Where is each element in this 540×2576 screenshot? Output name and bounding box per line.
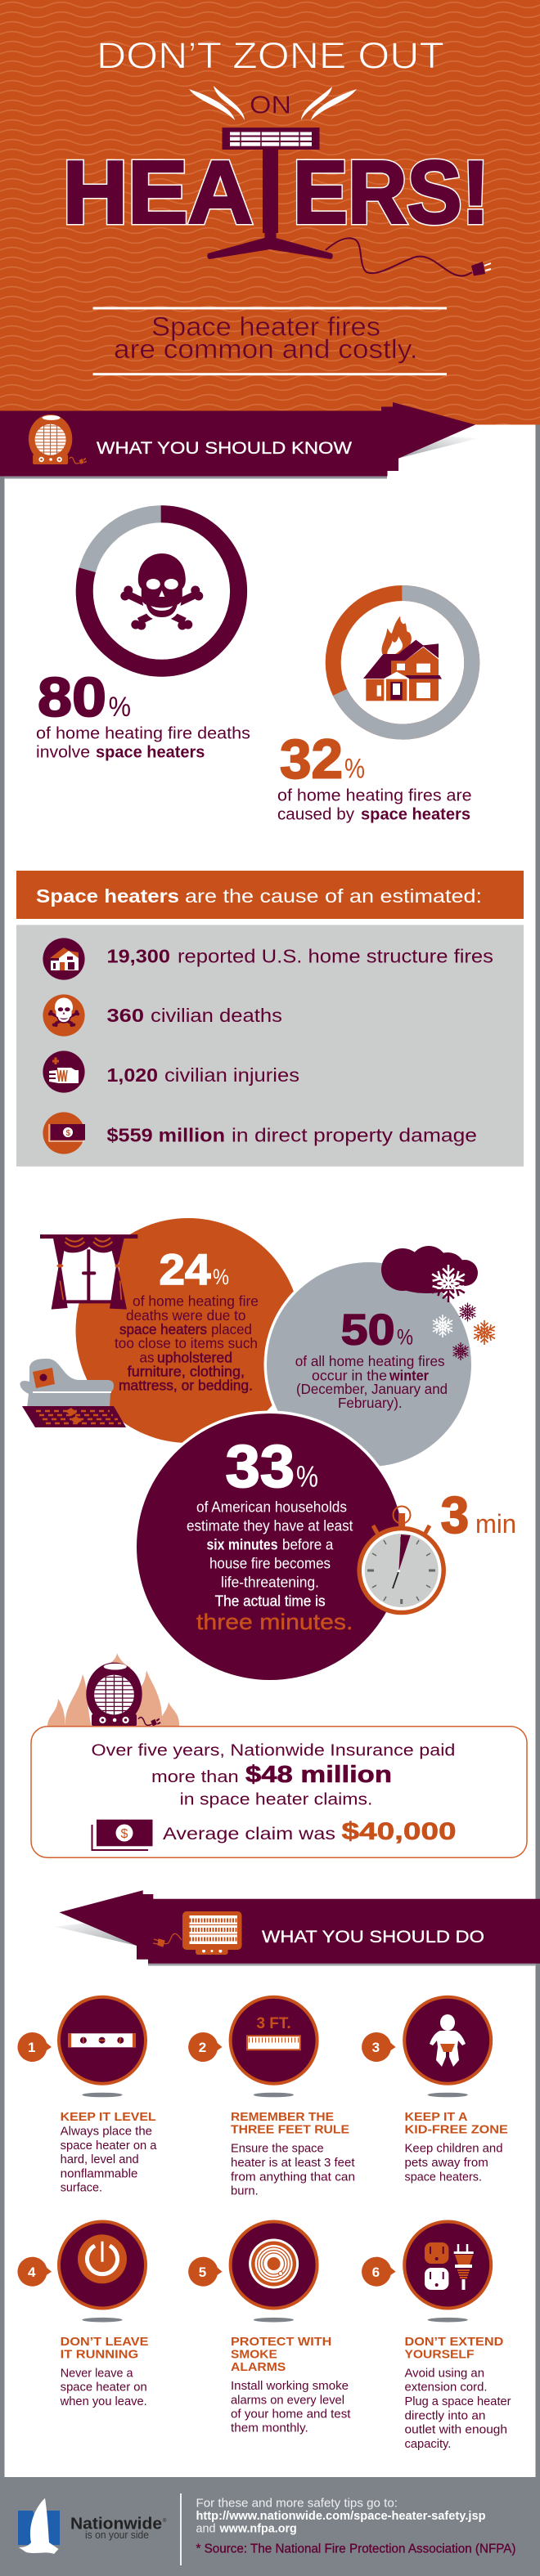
step text <box>231 2380 350 2435</box>
icon: house <box>43 938 85 980</box>
panel: estimated causes heading <box>16 871 524 919</box>
caption: space heaters <box>96 744 205 762</box>
claims text: Over five years, Nationwide Insurance paid <box>92 1740 455 1759</box>
caption: furniture, clothing, <box>128 1363 245 1379</box>
caption: estimate they have at least <box>187 1517 353 1534</box>
stat: deaths: 360 <box>106 1005 144 1026</box>
stat: property damage <box>106 1124 477 1145</box>
word heaters: HEA <box>63 142 253 242</box>
step text <box>61 2126 157 2195</box>
white content area <box>5 424 535 2477</box>
step heading <box>61 2335 148 2361</box>
icon: power button <box>59 2222 146 2309</box>
floor shadow <box>254 2093 294 2097</box>
stat: injuries: 1,020 <box>106 1064 158 1086</box>
safety tips text: www.nfpa.org <box>219 2521 297 2535</box>
average claim: Average claim was <box>163 1824 335 1844</box>
donut chart 80 percent <box>84 514 239 668</box>
divider <box>180 2493 182 2565</box>
step text: from anything that can <box>231 2171 355 2184</box>
icon: ruler: 3 FT. <box>257 2015 291 2032</box>
safety tips text: For these and more safety tips go to: <box>196 2497 398 2511</box>
donut chart 32 percent <box>333 593 472 732</box>
stat: 32 percent <box>277 593 472 824</box>
steam wisps <box>189 86 357 120</box>
stat: property damage: $559 million <box>106 1124 225 1145</box>
caption: of home heating fire deaths <box>36 724 250 742</box>
step text: directly into an <box>404 2409 485 2422</box>
number 50: 50 <box>341 1306 395 1355</box>
power cord and plug <box>326 238 491 276</box>
caption: of home heating fire <box>133 1293 259 1310</box>
panel: estimated causes heading: are the cause of an estimated: <box>185 885 482 907</box>
icon: fan heater <box>29 414 87 464</box>
number 24: 24 <box>159 1246 211 1294</box>
step badge 6: 6 <box>372 2265 380 2280</box>
step badge 2: 2 <box>199 2040 206 2055</box>
bubble: 24 percent <box>20 1218 301 1443</box>
step badge 2 <box>188 2032 223 2062</box>
step text: of your home and test <box>231 2408 350 2421</box>
step heading: THREE FEET RULE <box>231 2122 349 2136</box>
floor shadow <box>428 2318 468 2322</box>
stat: home fires: reported U.S. home structure fires <box>178 945 493 966</box>
banner heading: WHAT YOU SHOULD DO <box>262 1927 484 1947</box>
step badge 5: 5 <box>199 2265 206 2280</box>
title line: DON’T ZONE OUT <box>97 34 444 77</box>
rule top <box>93 307 447 309</box>
word heaters: ERS! <box>293 142 489 242</box>
icon: skull <box>43 994 85 1037</box>
panel: estimated counts <box>16 925 524 1167</box>
panel: nationwide claims <box>31 1727 527 1857</box>
safety tips text: and <box>196 2521 216 2535</box>
label: 3 min <box>441 1487 516 1544</box>
stat: injuries <box>106 1064 299 1086</box>
step badge 6 <box>362 2257 396 2287</box>
logo: nationwide: ® <box>163 2518 167 2524</box>
percent sign: % <box>213 1265 229 1289</box>
step badge 1: 1 <box>28 2040 35 2055</box>
caption: mattress, or bedding. <box>119 1378 253 1394</box>
icon: outlets and plug <box>404 2222 491 2309</box>
caption: space heaters <box>119 1321 207 1337</box>
label: 3 min: min <box>475 1509 516 1539</box>
step text <box>231 2143 355 2198</box>
step text: Avoid using an <box>404 2367 484 2380</box>
step text <box>404 2143 502 2184</box>
icon: skull and crossbones <box>120 553 203 629</box>
step heading: PROTECT WITH <box>231 2335 331 2349</box>
footer panel <box>0 2477 540 2576</box>
claims text: $48 million <box>245 1762 392 1788</box>
step text: when you leave. <box>60 2395 147 2408</box>
caption: involve <box>36 744 90 762</box>
claims text: more than <box>151 1767 239 1786</box>
subtitle: Space heater fires <box>151 312 380 342</box>
icon: rug <box>22 1406 126 1427</box>
rule bottom <box>93 373 447 375</box>
banner heading: WHAT YOU SHOULD KNOW <box>97 438 353 458</box>
word on: ON <box>250 90 291 119</box>
step text: Always place the <box>61 2126 152 2139</box>
stat: deaths <box>106 1005 282 1026</box>
caption: of home heating fires are <box>277 786 472 804</box>
step 3: kid-free zone <box>362 1997 508 2184</box>
word heaters: ERS! <box>293 142 489 242</box>
step text: surface. <box>61 2182 102 2195</box>
caption: house fire becomes <box>209 1556 331 1572</box>
caption: occur in the <box>312 1367 387 1383</box>
subtitle: are common and costly. <box>114 334 417 364</box>
step text: extension cord. <box>404 2381 488 2395</box>
banner: what you should do <box>55 1890 540 1965</box>
stat: property damage: in direct property damage <box>232 1124 477 1145</box>
step text: capacity. <box>404 2438 451 2451</box>
step 5: smoke alarms <box>188 2222 350 2435</box>
step badge 3: 3 <box>372 2040 380 2055</box>
icon: smoke alarm <box>231 2222 317 2309</box>
icon: snow cloud <box>381 1246 497 1360</box>
step 4: do not leave it running <box>17 2222 148 2408</box>
step text: nonflammable <box>61 2167 137 2180</box>
caption: upholstered <box>157 1350 232 1366</box>
bubble: 33 percent <box>134 1411 406 1682</box>
step text: alarms on every level <box>231 2394 344 2407</box>
claims text <box>92 1740 455 1809</box>
number 33: 33 <box>226 1433 295 1499</box>
caption: as <box>139 1350 155 1366</box>
stat: injuries: civilian injuries <box>164 1064 299 1086</box>
label: 3 min: 3 <box>441 1487 469 1544</box>
step badge 4 <box>17 2257 52 2287</box>
icon: radiant heater <box>153 1911 242 1955</box>
icon: heater in flames <box>47 1653 179 1727</box>
caption <box>115 1293 259 1394</box>
caption <box>187 1499 353 1610</box>
caption: caused by <box>277 806 354 824</box>
floor shadow <box>254 2318 294 2322</box>
step heading <box>231 2335 331 2374</box>
stat: deaths: civilian deaths <box>151 1005 282 1026</box>
caption: deaths were due to <box>126 1307 245 1324</box>
step text: space heater on a <box>61 2139 157 2153</box>
number 80: 80 <box>38 666 106 728</box>
step heading: DON’T EXTEND <box>404 2335 503 2349</box>
source note: * Source: The National Fire Protection Association (NFPA) <box>196 2542 515 2556</box>
step text: hard, level and <box>61 2153 139 2166</box>
step 2: three feet rule <box>188 1997 355 2198</box>
panel: estimated causes heading: Space heaters <box>36 885 179 907</box>
caption: (December, January and <box>296 1381 448 1397</box>
icon: stopwatch <box>359 1506 443 1612</box>
heater letter T <box>207 128 333 259</box>
step heading: REMEMBER THE <box>231 2110 334 2124</box>
step heading <box>231 2110 349 2136</box>
step text: Ensure the space <box>231 2143 324 2156</box>
step text: outlet with enough <box>404 2424 507 2437</box>
icon: baby <box>404 1997 491 2084</box>
step badge 4: 4 <box>28 2265 36 2280</box>
caption: February). <box>338 1395 403 1411</box>
caption: of all home heating fires <box>295 1353 445 1369</box>
step text: Plug a space heater <box>404 2395 511 2408</box>
caption: space heaters <box>361 806 470 824</box>
icon: sofa <box>20 1359 114 1408</box>
step text: heater is at least 3 feet <box>231 2157 355 2170</box>
caption: winter <box>389 1367 429 1383</box>
stat: 80 percent <box>36 514 250 762</box>
icon: spirit level <box>59 1997 146 2084</box>
word heaters <box>63 142 489 242</box>
caption: The actual time is <box>215 1593 326 1610</box>
step heading: ALARMS <box>231 2360 286 2374</box>
percent sign: % <box>397 1325 413 1350</box>
step text: Never leave a <box>61 2367 133 2380</box>
average claim <box>163 1818 457 1845</box>
step heading: KEEP IT LEVEL <box>61 2110 156 2124</box>
step heading: KID-FREE ZONE <box>404 2122 508 2136</box>
step text <box>60 2367 147 2408</box>
caption <box>295 1353 448 1411</box>
step 6: do not extend yourself <box>362 2222 511 2451</box>
bubble: 50 percent <box>263 1246 497 1470</box>
subtitle <box>114 312 417 364</box>
icon: money <box>92 1820 152 1850</box>
caption: too close to items such <box>115 1335 258 1351</box>
logo: nationwide <box>18 2498 167 2554</box>
step badge 3 <box>362 2032 396 2062</box>
caption: before a <box>282 1536 334 1552</box>
step text: pets away from <box>404 2157 488 2170</box>
step heading: IT RUNNING <box>61 2347 138 2361</box>
caption <box>36 724 250 762</box>
caption <box>277 786 472 824</box>
step heading <box>404 2110 508 2136</box>
step badge 5 <box>188 2257 223 2287</box>
icon: ruler <box>231 1997 317 2084</box>
icon: money <box>43 1112 85 1154</box>
icon: window with curtains <box>40 1234 137 1310</box>
step text: them monthly. <box>231 2422 308 2435</box>
step text: Keep children and <box>404 2143 502 2156</box>
floor shadow <box>82 2093 123 2097</box>
logo: nationwide: is on your side <box>85 2529 149 2541</box>
step text: space heaters. <box>404 2171 482 2184</box>
caption: of American households <box>196 1499 347 1515</box>
header panel <box>0 0 540 425</box>
step text: burn. <box>231 2185 259 2198</box>
stat: home fires: 19,300 <box>106 945 170 966</box>
step heading: SMOKE <box>231 2347 277 2361</box>
floor shadow <box>428 2093 468 2097</box>
safety tips text <box>196 2497 486 2535</box>
step text <box>404 2367 511 2451</box>
percent sign: % <box>109 692 131 723</box>
step badge 1 <box>17 2032 52 2062</box>
word heaters: HEA <box>63 142 253 242</box>
floor shadow <box>82 2318 123 2322</box>
icon: house on fire <box>363 616 442 701</box>
icon: money: $ <box>121 1827 128 1841</box>
claims text: in space heater claims. <box>180 1790 372 1809</box>
icon: money: $ <box>65 1129 70 1138</box>
caption: placed <box>211 1321 252 1337</box>
step text: Install working smoke <box>231 2380 349 2393</box>
step heading: DON’T LEAVE <box>61 2335 148 2349</box>
caption: life-threatening. <box>221 1575 319 1591</box>
logo: nationwide: Nationwide <box>70 2515 162 2533</box>
banner: what you should know <box>0 402 479 479</box>
step heading: YOURSELF <box>404 2347 475 2361</box>
callout: three minutes: three minutes. <box>196 1610 353 1634</box>
safety tips text: http://www.nationwide.com/space-heater-safety.jsp <box>196 2509 486 2523</box>
step text: space heater on <box>61 2381 147 2395</box>
average claim: $40,000 <box>342 1818 457 1845</box>
step 1: keep it level <box>17 1997 157 2195</box>
caption: six minutes <box>206 1536 278 1552</box>
step heading: KEEP IT A <box>404 2110 468 2124</box>
percent sign: % <box>296 1459 318 1493</box>
percent sign: % <box>344 754 365 785</box>
icon: bandaged hand <box>43 1051 85 1093</box>
number 32: 32 <box>280 728 343 791</box>
step heading <box>404 2335 503 2361</box>
